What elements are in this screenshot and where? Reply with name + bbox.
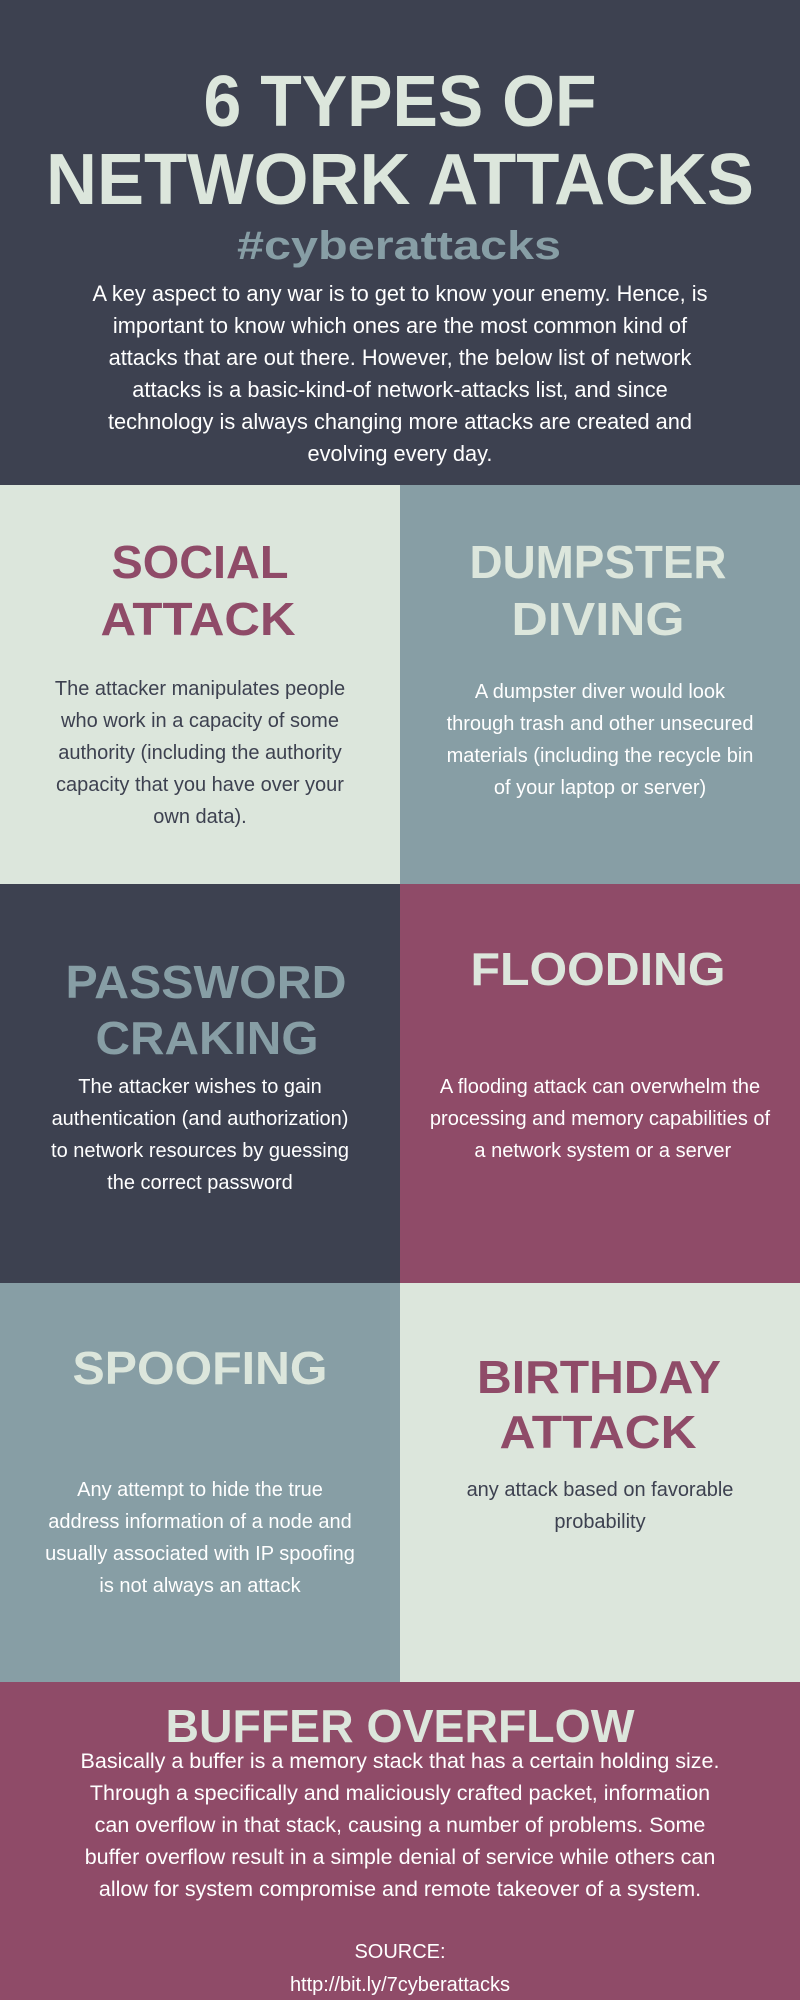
heading: DUMPSTER — [470, 536, 726, 588]
heading: SOCIAL — [112, 536, 288, 588]
source: SOURCE: — [354, 1941, 446, 1963]
body text: A flooding attack can overwhelm the processing and memory capabilities of a network system or a server — [430, 1076, 770, 1162]
body text: A dumpster diver would look through trash and other unsecured materials (including the recycle bin of your laptop or server) — [447, 681, 753, 799]
body text: The attacker manipulates people who work in a capacity of some authority (including the authority capacity that you have over your own data). — [55, 678, 345, 828]
panel: social attack — [0, 485, 400, 884]
heading — [100, 536, 296, 645]
source: http://bit.ly/7cyberattacks — [290, 1974, 510, 1996]
heading: ATTACK — [500, 1406, 696, 1458]
panel: password craking — [0, 884, 400, 1283]
heading: SPOOFING — [72, 1342, 328, 1394]
title: NETWORK ATTACKS — [46, 140, 754, 220]
heading — [477, 1351, 721, 1458]
body text: any attack based on favorable probability — [467, 1479, 733, 1533]
heading: ATTACK — [100, 593, 296, 645]
panel: dumpster diving — [400, 485, 800, 884]
heading: BUFFER OVERFLOW — [166, 1700, 635, 1752]
heading — [470, 536, 726, 645]
heading — [66, 956, 346, 1064]
intro text: A key aspect to any war is to get to know your enemy. Hence, is important to know which ones are the most common kind of attacks that are out there. However, the below list of network attacks is a basic-kind-of network-attacks list, and since technology is always changing more attacks are created and evolving every day. — [92, 281, 708, 466]
heading: PASSWORD — [66, 956, 346, 1008]
heading: FLOODING — [470, 943, 726, 995]
panel: flooding — [400, 884, 800, 1283]
heading: DIVING — [512, 593, 684, 645]
title — [46, 62, 754, 220]
body text: The attacker wishes to gain authentication (and authorization) to network resources by guessing the correct password — [51, 1076, 349, 1194]
header panel — [0, 0, 800, 485]
source — [290, 1941, 510, 1996]
title: 6 TYPES OF — [204, 62, 596, 142]
panel: birthday attack — [400, 1283, 800, 1682]
panel: spoofing — [0, 1283, 400, 1682]
body text: Basically a buffer is a memory stack that has a certain holding size. Through a specifically and maliciously crafted packet, information can overflow in that stack, causing a number of problems. Some buffer overflow result in a simple denial of service while others can allow for system compromise and remote takeover of a system. — [81, 1749, 719, 1901]
heading: CRAKING — [96, 1012, 318, 1064]
heading: BIRTHDAY — [477, 1351, 721, 1403]
panel: buffer overflow — [0, 1682, 800, 2000]
body text: Any attempt to hide the true address information of a node and usually associated with IP spoofing is not always an attack — [45, 1479, 355, 1597]
subtitle hashtag: #cyberattacks — [237, 224, 561, 268]
